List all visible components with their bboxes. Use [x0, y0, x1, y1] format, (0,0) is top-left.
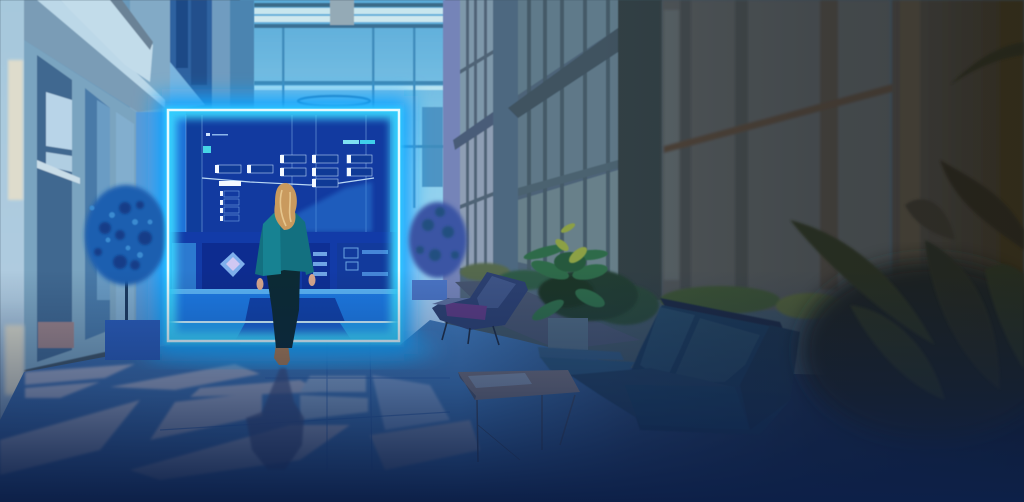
- distant column and tall window: [130, 0, 170, 112]
- plant behind portal right: [409, 202, 467, 300]
- console desk: [168, 289, 399, 294]
- lower consoles: [172, 232, 394, 289]
- jacket: [255, 213, 314, 276]
- glow behind portal: [155, 96, 411, 354]
- foreground dark plant mass: [800, 260, 1024, 440]
- woman walking, rear view: [255, 183, 316, 365]
- large foreground plant right: [790, 42, 1024, 400]
- window wall: [24, 40, 136, 370]
- central skylight window: [240, 0, 445, 350]
- holographic portal screen: [168, 110, 399, 341]
- floor tile lines: [160, 342, 450, 470]
- floor light reflections: [0, 364, 480, 480]
- left building wall and ceiling: [0, 0, 254, 430]
- inner frame glow: [168, 110, 399, 341]
- right window bays: near: [443, 0, 662, 300]
- right side dimming overlay: [600, 0, 1024, 502]
- armchair: [432, 272, 528, 345]
- heels: [274, 344, 290, 365]
- woman's floor reflection: [246, 368, 304, 470]
- floor glow from portal: [140, 334, 440, 366]
- coffee table: [458, 370, 580, 462]
- balcony parapet: [60, 0, 153, 82]
- floor: [0, 320, 1024, 502]
- building soffit: [24, 0, 165, 112]
- right window bays: far: [662, 0, 1024, 320]
- glowing portal frame: [168, 110, 399, 341]
- potted plant: [522, 221, 638, 350]
- potted tree left: [85, 185, 167, 360]
- dashboard display: [168, 112, 399, 235]
- bottom navy fade: [0, 270, 1024, 502]
- large sofa: [538, 298, 800, 435]
- hedge: [460, 263, 844, 325]
- trousers: [266, 270, 300, 348]
- planter wall: [455, 280, 640, 350]
